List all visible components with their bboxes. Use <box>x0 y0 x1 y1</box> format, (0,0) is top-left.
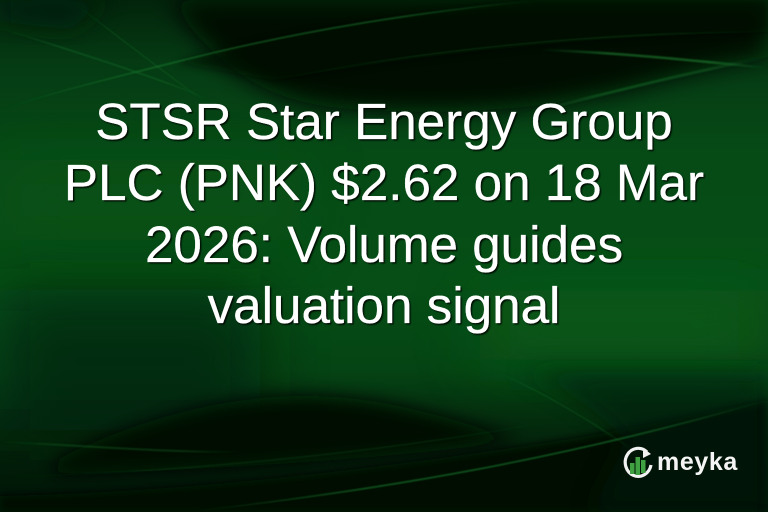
bottom dark band <box>0 400 768 512</box>
wordmark: meyka <box>657 448 738 476</box>
left shade and right glow <box>0 290 260 430</box>
icon: circular arrow with bars <box>624 446 653 478</box>
top dark swoosh <box>170 0 768 112</box>
title: PLC (PNK) $2.62 on 18 Mar <box>64 154 704 211</box>
dark mound <box>50 396 520 474</box>
title: 2026: Volume guides <box>145 216 623 273</box>
title: valuation signal <box>208 277 560 334</box>
logo: meyka <box>624 446 738 478</box>
title: STSR Star Energy Group <box>95 93 673 150</box>
title <box>64 93 706 336</box>
